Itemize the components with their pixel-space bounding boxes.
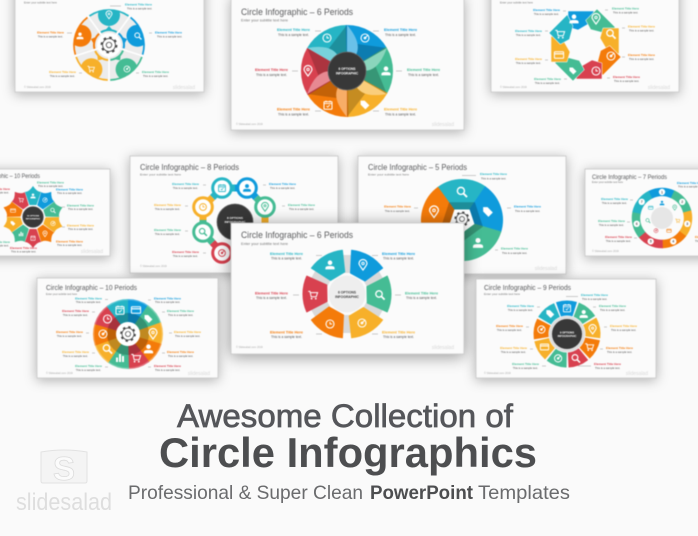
label: upper left: This is a sample text. [602, 201, 627, 205]
label: lower right: This is a sample text. [168, 354, 193, 358]
label: top left [277, 28, 321, 37]
panel: six-block ring slide, main centre [231, 223, 464, 354]
slide title: Circle Infographic – 7 Periods [592, 175, 667, 181]
label: right: This is a sample text. [406, 296, 437, 300]
label: lower left: Element Title Here [62, 350, 89, 354]
label: lower right: Element Title Here [501, 246, 528, 250]
chart: seven-part numbered ring: 1 [661, 190, 663, 194]
label: upper right: This is a sample text. [600, 308, 625, 312]
label: right: This is a sample text. [175, 334, 200, 338]
label: bottom right [373, 108, 417, 116]
slide footer: © Slidesalad.com 2019 [236, 122, 263, 126]
label: right [169, 330, 201, 338]
label: bottom right: This is a sample text. [383, 335, 414, 339]
label: right lower: This is a sample text. [68, 227, 93, 231]
label: top right: This is a sample text. [613, 10, 638, 14]
label: bottom: Element Title Here [10, 246, 37, 250]
label: left: This is a sample text. [256, 73, 287, 77]
label: right: This is a sample text. [408, 73, 439, 77]
label: right: Element Title Here [407, 68, 440, 72]
label: top right: This is a sample text. [385, 33, 416, 37]
heading: line two: Circle Infographics [159, 429, 537, 476]
label: upper right: Element Title Here [56, 188, 83, 192]
chart: six-part pinwheel: INFOGRAPHIC [336, 71, 359, 75]
label: right [395, 292, 438, 300]
label: upper right [162, 309, 194, 317]
label: bottom left [270, 330, 322, 339]
label: left upper: This is a sample text. [155, 207, 180, 211]
label: left lower [154, 228, 188, 236]
panel: nine-part ring slide, bottom right [476, 279, 656, 378]
slide footer: © Slidesalad.com 2019 [500, 85, 527, 89]
label: upper left [515, 29, 548, 37]
label: lower right: This is a sample text. [629, 57, 654, 61]
label: upper right [56, 188, 83, 195]
label: top [37, 180, 64, 188]
label: right upper [62, 204, 94, 211]
panel: octagon arrow ring slide, top right [491, 0, 679, 92]
label: upper left: Element Title Here [507, 304, 534, 308]
slide watermark: slidesalad [535, 266, 557, 272]
label: right: This is a sample text. [289, 207, 314, 211]
label: bottom left: This is a sample text. [513, 366, 538, 370]
slide subtitle: Enter your subtitle text here [46, 292, 77, 296]
slide subtitle: Enter your subtitle text here [140, 172, 181, 176]
label: top right: This is a sample text. [270, 186, 295, 190]
label: right [396, 68, 440, 77]
chart: ten-arrow star: 10 OPTIONS [27, 216, 40, 218]
slide title: Circle Infographic – 8 Periods [140, 163, 239, 172]
slide watermark: slidesalad [626, 371, 648, 377]
label: top left: Element Title Here [270, 252, 303, 256]
label: bottom left: This is a sample text. [278, 112, 309, 116]
chart: six-part pinwheel: 6 OPTIONS [338, 67, 356, 71]
label: left: Element Title Here [384, 204, 411, 208]
label: top right [148, 296, 181, 304]
slide subtitle: Enter your subtitle text here [241, 242, 288, 246]
chart: seven-part numbered ring: 3 [686, 222, 688, 226]
label: bottom left: Element Title Here [512, 362, 539, 366]
label: bottom left [534, 77, 567, 85]
panel: ten-part star slide, left edge [0, 169, 110, 256]
label: upper left [507, 304, 540, 312]
label: lower right: This is a sample text. [502, 251, 527, 255]
label: top right: Element Title Here [269, 182, 296, 186]
label: top: This is a sample text. [481, 176, 506, 180]
slide watermark: slidesalad [432, 122, 454, 128]
label: lower left [0, 240, 10, 248]
label: bottom right [578, 362, 621, 370]
label: upper right: This is a sample text. [629, 28, 654, 32]
label: right: Element Title Here [174, 330, 201, 334]
chart: five-part pie [430, 187, 493, 249]
label: upper right: This is a sample text. [168, 313, 193, 317]
slide subtitle: Enter your subtitle text here [24, 1, 57, 5]
slide subtitle: Enter your subtitle text here [484, 292, 521, 296]
label: top right [372, 252, 415, 260]
label: lower left: Element Title Here [605, 235, 632, 239]
label: top left: This is a sample text. [76, 300, 101, 304]
label: left [255, 68, 298, 77]
label: top left: Element Title Here [533, 8, 560, 12]
chart: seven-part numbered ring: 6 [636, 222, 638, 226]
label: bottom left: This is a sample text. [271, 335, 302, 339]
label: top left: This is a sample text. [271, 256, 302, 260]
label: upper right: Element Title Here [628, 24, 655, 28]
label: lower right: Element Title Here [606, 346, 633, 350]
label: right [149, 30, 182, 38]
label: upper left: Element Title Here [62, 309, 89, 313]
label: top: Element Title Here [37, 180, 64, 184]
panel: five-part circle slide, top left [15, 0, 204, 94]
label: right: Element Title Here [288, 203, 315, 207]
label: right: This is a sample text. [611, 328, 636, 332]
chart: seven-part numbered ring: 7 [641, 200, 643, 204]
label: bottom right [148, 364, 181, 372]
label: bottom left [172, 250, 206, 258]
label: bottom right [607, 75, 640, 83]
heading: line one: Awesome Collection of [177, 398, 513, 434]
label: bottom left: Element Title Here [75, 364, 102, 368]
label: top left: This is a sample text. [534, 12, 559, 16]
label: lower left [500, 346, 533, 354]
chart: seven-part numbered ring: 2 [681, 200, 683, 204]
label: bottom right: Element Title Here [384, 108, 417, 112]
label: lower left [605, 235, 637, 243]
label: left lower: Element Title Here [154, 228, 181, 232]
label: upper left: Element Title Here [515, 29, 542, 33]
subheading: PowerPoint [370, 482, 473, 504]
slide subtitle: Enter your subtitle text here [500, 1, 533, 5]
label: upper left: This is a sample text. [516, 33, 541, 37]
chart: nine-part ring [530, 297, 604, 371]
label: lower left: This is a sample text. [501, 350, 526, 354]
label: lower right: This is a sample text. [607, 350, 632, 354]
label: lower left: This is a sample text. [50, 74, 75, 78]
label: left [255, 292, 299, 300]
slide watermark: slidesalad [81, 249, 103, 255]
slide subtitle: Enter your subtitle text here [592, 181, 624, 184]
label: left: This is a sample text. [497, 328, 522, 332]
label: left lower: This is a sample text. [155, 232, 180, 236]
label: top right: Element Title Here [382, 252, 415, 256]
label: top right: Element Title Here [154, 296, 181, 300]
label: top [566, 293, 608, 301]
label: lower left: This is a sample text. [516, 61, 541, 65]
label: bottom right [372, 330, 415, 339]
label: left: This is a sample text. [256, 296, 287, 300]
label: left: This is a sample text. [38, 34, 63, 38]
label: right upper: Element Title Here [67, 204, 94, 208]
label: bottom left: This is a sample text. [535, 81, 560, 85]
label: right [282, 203, 315, 211]
chart: seven-part numbered ring: 5 [650, 240, 652, 244]
subheading: Professional & Super Clean [128, 482, 363, 504]
label: lower left: Element Title Here [49, 70, 76, 74]
panel: eight-circle slide, centre left [130, 156, 338, 273]
label: bottom: This is a sample text. [11, 250, 36, 254]
label: right [604, 324, 637, 332]
chart: seven-part numbered ring: 4 [672, 240, 674, 244]
slide title: Circle Infographic – 5 Periods [368, 163, 467, 172]
label: lower right: Element Title Here [142, 70, 169, 74]
label: top: Element Title Here [581, 293, 608, 297]
slide title: Circle Infographic – 9 Periods [484, 285, 571, 292]
label: top left [172, 182, 206, 190]
label: bottom right: Element Title Here [613, 75, 640, 79]
label: upper left [0, 187, 10, 194]
label: lower right: Element Title Here [56, 240, 83, 244]
panel: five-part pie slide, centre right [358, 156, 566, 274]
chart: six-block ring: 6 OPTIONS [338, 290, 357, 294]
label: right: This is a sample text. [515, 209, 540, 213]
slide title: Circle Infographic – 6 Periods [241, 7, 353, 17]
chart: ten-arrow star: INFOGRAPHIC [26, 217, 41, 220]
slide title: Circle Infographic – 10 Periods [46, 285, 137, 292]
label: right: Element Title Here [610, 324, 637, 328]
label: right [507, 204, 541, 213]
label: upper left [62, 309, 95, 317]
label: bottom [10, 246, 37, 254]
chart: ten-arrow star [1, 186, 65, 248]
slide subtitle: Enter your subtitle text here [368, 172, 409, 176]
label: left [598, 219, 630, 227]
label: bottom right: Element Title Here [154, 364, 181, 368]
label: top: Element Title Here [125, 2, 152, 6]
label: left: Element Title Here [255, 68, 288, 72]
slide watermark: slidesalad [188, 371, 210, 377]
chart centre caption: 8 OPTIONS [227, 216, 243, 220]
subheading: Templates [478, 482, 570, 504]
chart: five-part gear circle [72, 8, 146, 82]
label: top left: Element Title Here [277, 28, 310, 32]
label: top right: Element Title Here [384, 28, 417, 32]
chart: six-block ring [291, 241, 403, 347]
label: top: Element Title Here [480, 172, 507, 176]
label: lower right [56, 240, 83, 247]
label: right upper: This is a sample text. [68, 207, 93, 211]
slide subtitle: Enter your subtitle text here [241, 18, 288, 22]
label: lower left: Element Title Here [500, 346, 527, 350]
label: bottom left [277, 108, 321, 116]
label: top right [373, 28, 417, 37]
chart: six-block ring: INFOGRAPHIC [335, 295, 359, 299]
label: top left: This is a sample text. [173, 186, 198, 190]
label: bottom right: Element Title Here [382, 330, 415, 334]
slide watermark: slidesalad [648, 85, 670, 91]
label: lower left [62, 350, 95, 358]
label: left: Element Title Here [56, 330, 83, 334]
logo: slidesalad [16, 450, 112, 516]
label: left: Element Title Here [37, 30, 64, 34]
label: lower left [49, 70, 82, 78]
label: top left: Element Title Here [75, 296, 102, 300]
chart: seven-part numbered ring [625, 181, 698, 255]
label: right lower [62, 224, 94, 231]
label: right: This is a sample text. [157, 34, 182, 38]
label: bottom left [75, 364, 108, 372]
label: lower left: This is a sample text. [63, 354, 88, 358]
label: top right [263, 182, 296, 190]
label: lower left: This is a sample text. [606, 239, 631, 243]
panel: ten-part pie slide, bottom left [37, 278, 218, 378]
label: right: Element Title Here [514, 204, 541, 208]
label: bottom right: This is a sample text. [155, 368, 180, 372]
label: upper left: This is a sample text. [508, 308, 533, 312]
label: left: This is a sample text. [385, 209, 410, 213]
label: top left [75, 296, 108, 304]
label: left [37, 30, 72, 38]
label: bottom right: This is a sample text. [385, 112, 416, 116]
panel: seven-part numbered ring slide, right edge [585, 169, 698, 256]
chart: octagon arrow ring [549, 9, 621, 81]
label: bottom right: This is a sample text. [614, 79, 639, 83]
label: top right: This is a sample text. [155, 300, 180, 304]
label: top: This is a sample text. [582, 297, 607, 301]
label: lower right: Element Title Here [167, 350, 194, 354]
label: left [496, 324, 529, 332]
label: lower left: Element Title Here [515, 57, 542, 61]
label: left: Element Title Here [255, 292, 288, 296]
label: left: This is a sample text. [599, 223, 624, 227]
chart: ten-part pie [94, 300, 162, 368]
label: bottom left: Element Title Here [270, 330, 303, 334]
label: bottom right: Element Title Here [594, 362, 621, 366]
label: top: This is a sample text. [38, 184, 63, 188]
label: lower right [622, 53, 655, 61]
label: upper right [593, 304, 626, 312]
label: left [56, 330, 89, 338]
label: bottom left: Element Title Here [277, 108, 310, 112]
label: bottom left: Element Title Here [534, 77, 561, 81]
subheading [128, 482, 570, 504]
label: upper right [622, 24, 655, 32]
chart: nine-part ring: 9 OPTIONS [560, 330, 574, 334]
chart: six-part pinwheel [287, 14, 407, 128]
panel: six-part pinwheel slide, top centre [231, 0, 464, 130]
slide watermark: slidesalad [173, 85, 195, 91]
label: top right: Element Title Here [612, 6, 639, 10]
slide footer: © Slidesalad.com 2019 [236, 345, 263, 349]
label: upper left [601, 197, 633, 205]
slide watermark: slidesalad [432, 345, 454, 351]
label: left upper [154, 203, 188, 211]
chart: nine-part ring: INFOGRAPHIC [558, 334, 576, 338]
label: bottom left: Element Title Here [172, 250, 199, 254]
slide footer: © Slidesalad.com 2019 [140, 264, 167, 268]
label: bottom left: This is a sample text. [76, 368, 101, 372]
label: lower left [515, 57, 548, 65]
label: right lower: Element Title Here [67, 224, 94, 228]
label: top right: This is a sample text. [383, 256, 414, 260]
label: upper right: This is a sample text. [57, 191, 82, 195]
label: top [110, 2, 152, 10]
label: upper right: Element Title Here [599, 304, 626, 308]
label: left: Element Title Here [598, 219, 625, 223]
logo: slidesalad: S [53, 450, 75, 487]
slide footer: © Slidesalad.com 2019 [484, 371, 511, 375]
label: upper right: Element Title Here [167, 309, 194, 313]
label: lower right: This is a sample text. [57, 243, 82, 247]
label: right: Element Title Here [405, 292, 438, 296]
label: left [384, 204, 418, 213]
label: lower right: Element Title Here [628, 53, 655, 57]
label: right: Element Title Here [155, 30, 182, 34]
label: bottom left: This is a sample text. [173, 254, 198, 258]
label: top left [533, 8, 566, 16]
label: lower right [695, 235, 698, 243]
chart: eight linked circles [194, 179, 274, 262]
label: left upper: Element Title Here [154, 203, 181, 207]
slide footer: © Slidesalad.com 2019 [46, 371, 73, 375]
label: left: This is a sample text. [57, 334, 82, 338]
slide title: Circle Infographic – 6 Periods [241, 230, 353, 240]
label: upper left: Element Title Here [601, 197, 628, 201]
label: top right [605, 6, 639, 14]
slide footer: © Slidesalad.com 2019 [592, 249, 619, 253]
label: top left: Element Title Here [172, 182, 199, 186]
label: lower right: This is a sample text. [143, 74, 168, 78]
label: bottom right: This is a sample text. [595, 366, 620, 370]
label: top left [270, 252, 322, 260]
label: top right [677, 181, 698, 188]
label: top [462, 172, 507, 180]
label: lower right [495, 246, 528, 255]
chart centre caption: INFOGRAPHIC [224, 220, 246, 224]
label: upper left: This is a sample text. [63, 313, 88, 317]
label: top: This is a sample text. [127, 6, 152, 10]
label: lower right [600, 346, 633, 354]
label: lower right [136, 70, 169, 78]
label: lower right [162, 350, 194, 358]
label: left: Element Title Here [496, 324, 523, 328]
slide footer: © Slidesalad.com 2019 [24, 85, 51, 89]
logo: slidesalad: slidesalad [16, 489, 112, 516]
label: bottom left [512, 362, 546, 370]
label: top left: This is a sample text. [278, 33, 309, 37]
